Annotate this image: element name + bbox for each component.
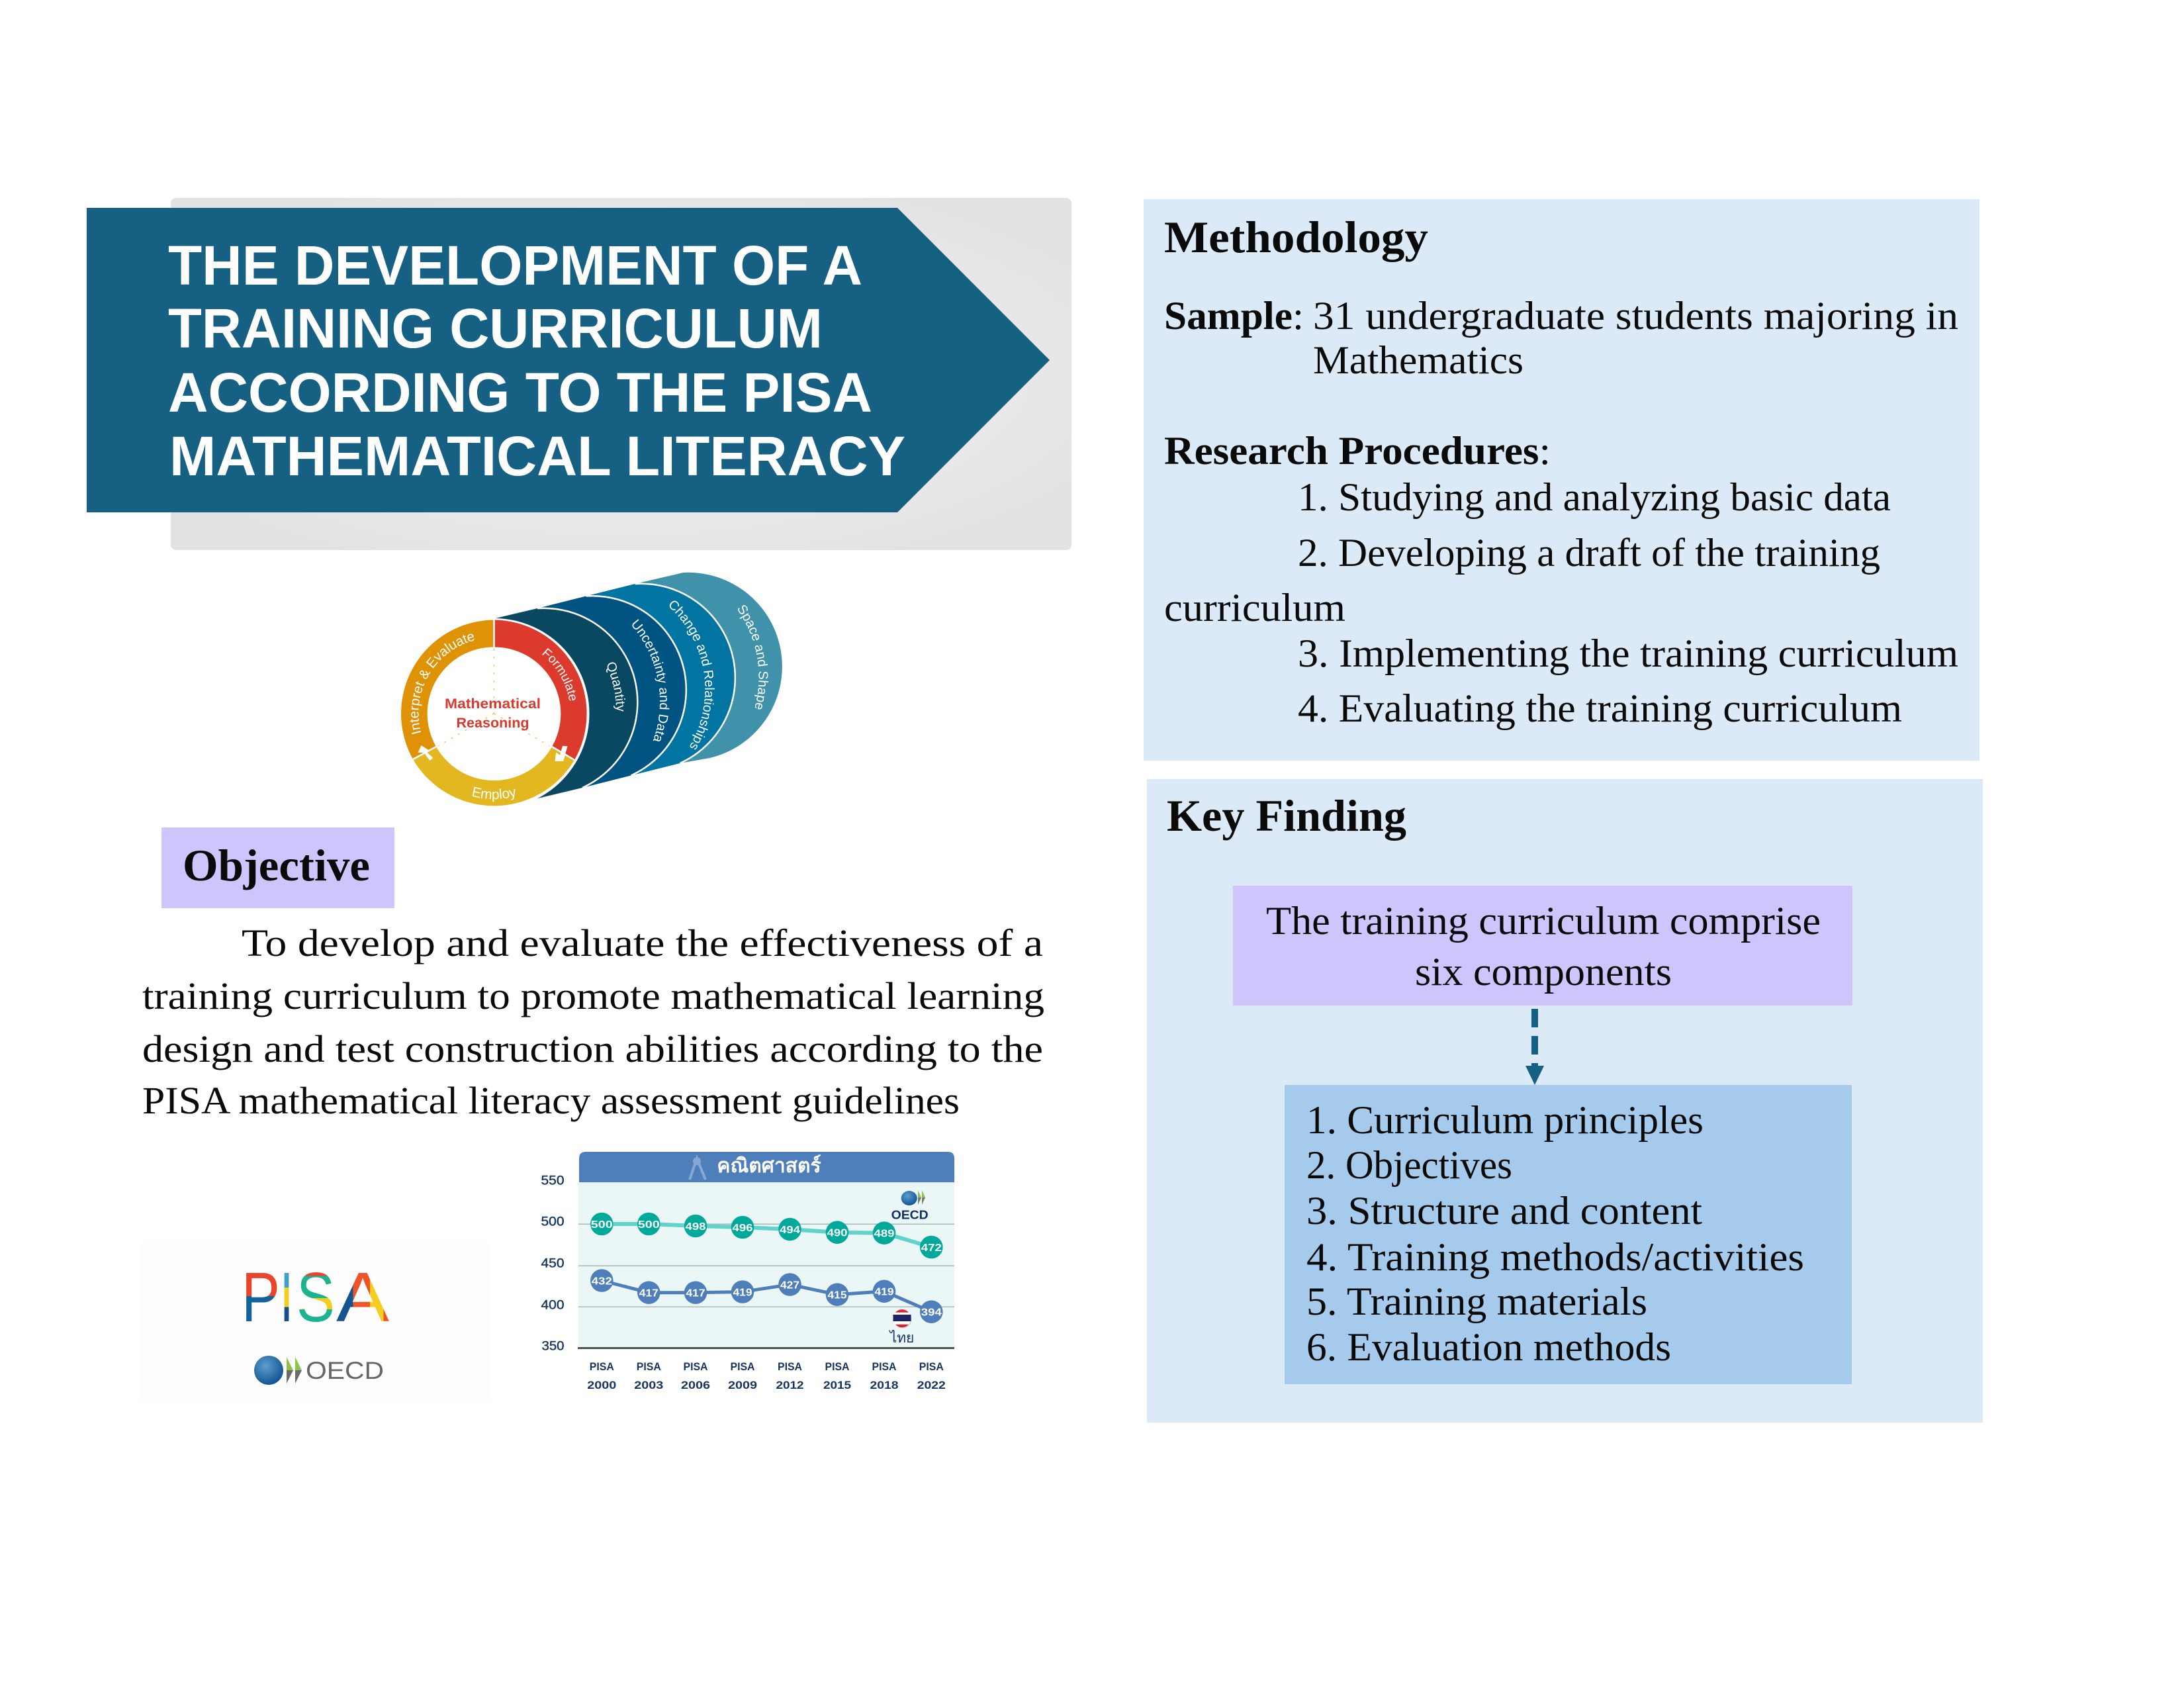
Objective text [142,921,1044,1122]
list: six components: 2. Objectives [1306,1143,1512,1187]
Sample text: Mathematics [1313,338,1524,382]
y axis labels: 550 [541,1174,564,1188]
ring backing [398,618,589,809]
x axis labels: 2015 [823,1379,851,1391]
OECD series: 500 [591,1219,613,1231]
icon: OECD chevrons [287,1357,302,1383]
gridlines [578,1224,954,1307]
title [168,234,905,487]
y axis labels: 400 [541,1298,564,1312]
title banner arrow [87,208,1050,512]
title: MATHEMATICAL LITERACY [169,425,905,487]
Thailand series: 415 [827,1290,847,1301]
Methodology heading: Methodology [1164,212,1428,262]
y axis labels [541,1174,564,1353]
x axis labels: 2018 [870,1379,899,1391]
panel: Methodology [1144,199,1979,761]
icon: cycle arrow right [555,746,568,761]
ring segment: Interpret and Evaluate [401,620,494,759]
PISA framework cylinder diagram [401,572,782,806]
y axis labels: 450 [541,1256,564,1270]
Research procedures [1164,429,1958,730]
OECD series: 494 [780,1225,800,1236]
Objective text: To develop and evaluate the effectiveness of a [242,921,1043,964]
list: six components: 4. Training methods/activities [1306,1235,1804,1279]
x axis labels: 2022 [917,1379,946,1391]
x axis labels: 2000 [587,1379,616,1391]
OECD series marker: OECD [891,1208,929,1222]
x axis labels [587,1360,946,1391]
title: THE DEVELOPMENT OF A [168,234,862,297]
ring segment: Formulate [494,620,587,760]
content labels: Change and Relationships [670,601,715,749]
PISA wordmark: S [296,1258,335,1336]
list: six components: 6. Evaluation methods [1306,1325,1671,1369]
OECD series marker [891,1190,929,1222]
x axis labels: 2009 [728,1379,757,1391]
list: six components: 1. Curriculum principles [1306,1098,1704,1142]
Objective text: design and test construction abilities according to the [142,1027,1043,1070]
Key Finding heading: Key Finding [1167,790,1406,841]
PISA wordmark: P [242,1258,280,1336]
layer: Change and Relationships [586,584,735,776]
Research procedures: 1. Studying and analyzing basic data [1298,475,1891,519]
Thailand series [590,1269,943,1323]
Sample text [1164,294,1958,382]
content labels: Uncertainty and Data [633,619,670,741]
ring labels: Employ [473,786,515,802]
Sample text: 31 undergraduate students majoring in [1313,294,1958,338]
icon: compass [690,1155,705,1180]
list: six components [1285,1085,1852,1384]
x axis labels: PISA [825,1360,850,1373]
chart header label: คณิตศาสตร์ [717,1154,821,1177]
Thailand series: 432 [592,1276,612,1287]
line chart: PISA math scores [541,1152,954,1391]
Objective text: training curriculum to promote mathematical learning [142,974,1044,1017]
PISA wordmark: I [280,1258,293,1336]
Objective heading: Objective [183,840,370,890]
ring labels [410,634,576,802]
y axis labels: 350 [541,1339,564,1353]
icon: OECD globe [254,1356,283,1385]
ring segment: Employ [413,747,574,806]
Thailand flag marker [889,1309,914,1346]
OECD series: 472 [921,1243,942,1254]
x axis labels: PISA [778,1360,802,1373]
content labels: Space and Shape [738,605,768,710]
icon: cycle arrow left [418,745,433,761]
OECD series: 498 [686,1221,706,1233]
Thailand series: 394 [921,1307,942,1319]
x axis labels: PISA [590,1360,614,1373]
layer: Quantity [487,608,637,800]
Thailand series: 419 [733,1287,752,1299]
OECD series [590,1213,943,1258]
callout: six components: The training curriculum comprise [1266,899,1821,943]
x axis labels: PISA [872,1360,896,1373]
x axis labels: PISA [683,1360,708,1373]
center label [445,696,541,731]
layer edges [537,584,735,788]
x axis labels: PISA [637,1360,661,1373]
list: six components: 5. Training materials [1306,1280,1647,1323]
content labels: Quantity [606,662,625,712]
Research procedures: Research Procedures : [1164,429,1551,473]
layer: Uncertainty and Data [537,596,686,788]
Objective heading [161,827,394,908]
title banner backing panel [171,198,1071,550]
title: TRAINING CURRICULUM [168,297,823,359]
OECD series: 496 [732,1223,753,1234]
Thailand series: 417 [686,1288,705,1299]
panel: Key Finding [1147,779,1983,1423]
Objective text: PISA mathematical literacy assessment guidelines [142,1079,960,1122]
dotted guides [438,649,549,746]
Thailand series: 417 [639,1288,659,1299]
x axis labels: 2003 [634,1379,663,1391]
OECD series: 489 [874,1229,895,1240]
Research procedures: curriculum [1164,586,1345,630]
x axis labels: PISA [919,1360,944,1373]
Thailand flag marker: ไทย [889,1330,914,1346]
center label: Reasoning [457,716,529,731]
x axis labels: 2012 [776,1379,803,1391]
Research procedures: 4. Evaluating the training curriculum [1298,686,1902,730]
callout: six components [1233,886,1852,1006]
layer: Space and Shape [635,573,782,763]
chart plot background [578,1182,954,1348]
callout: six components: six components [1415,950,1672,994]
ring separators [413,619,574,760]
Thailand series: 427 [780,1280,799,1291]
Sample text: Sample: [1164,294,1304,338]
OECD wordmark: OECD [306,1357,384,1384]
x axis labels: 2006 [681,1379,710,1391]
Research procedures: 3. Implementing the training curriculum [1298,632,1958,675]
PISA wordmark: A [336,1258,389,1336]
arrow: dashed down [1525,1009,1544,1085]
OECD series: 490 [827,1228,848,1239]
OECD series: 500 [638,1219,660,1231]
ring labels: Formulate [542,648,576,700]
content labels [606,601,768,749]
PISA OECD logo [140,1243,490,1401]
list: six components: 3. Structure and content [1306,1189,1702,1233]
chart header [579,1152,954,1182]
y axis labels: 500 [541,1215,564,1229]
center label: Mathematical [445,696,541,712]
x axis labels: PISA [731,1360,754,1373]
PISA wordmark [242,1258,389,1336]
Research procedures: 2. Developing a draft of the training [1298,531,1880,575]
ring labels: Interpret & Evaluate [410,634,474,735]
Thailand series: 419 [875,1287,894,1298]
title: ACCORDING TO THE PISA [168,361,872,424]
